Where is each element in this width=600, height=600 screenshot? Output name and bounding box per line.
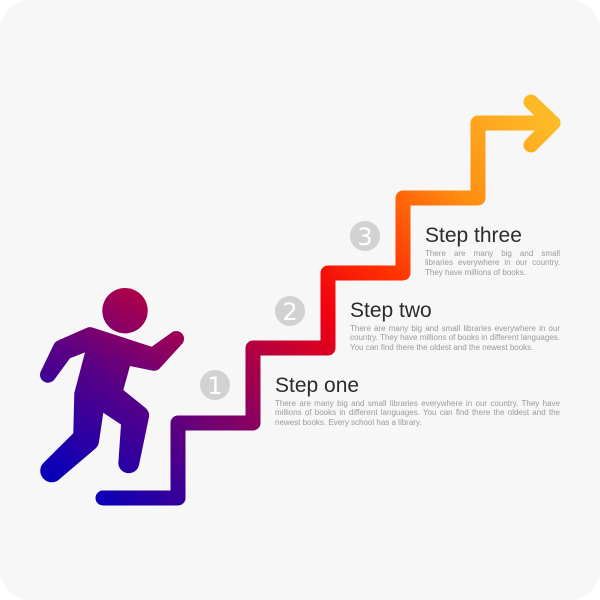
person body <box>40 327 184 482</box>
description: step three: libraries everywhere in our country. <box>425 258 560 267</box>
stair arrow line <box>103 102 553 498</box>
heading: step two: Step two <box>350 298 432 322</box>
badge 1 <box>200 370 230 400</box>
badge 3 <box>350 221 380 251</box>
text block: step one <box>275 374 560 427</box>
arrow head <box>531 102 553 145</box>
text block: step two <box>350 298 560 352</box>
description: step two <box>350 324 560 352</box>
description: step one <box>275 398 560 427</box>
badge 2 <box>275 296 305 326</box>
person head <box>102 288 148 333</box>
heading: step three: Step three <box>425 224 522 246</box>
description: step one: newest books. Every school has a library. <box>275 418 422 427</box>
description: step two: country. They have millions of books in different languages. <box>350 333 560 342</box>
description: step two: There are many big and small libraries everywhere in our <box>350 324 560 332</box>
heading: step one: Step one <box>275 374 359 396</box>
description: step three <box>425 248 560 277</box>
badge 3: 3 <box>357 223 373 251</box>
description: step three: There are many big and small <box>425 248 560 258</box>
badge 1: 1 <box>207 372 223 400</box>
description: step one: There are many big and small libraries everywhere in our country. They have <box>275 398 560 408</box>
description: step one: millions of books in different languages. You can find there the oldest and the <box>275 408 560 417</box>
description: step three: They have millions of books. <box>425 268 526 277</box>
badge 2: 2 <box>282 298 298 326</box>
description: step two: You can find there the oldest and the newest books. <box>350 343 533 352</box>
icon: running person <box>40 288 184 482</box>
text block: step three <box>425 224 560 277</box>
